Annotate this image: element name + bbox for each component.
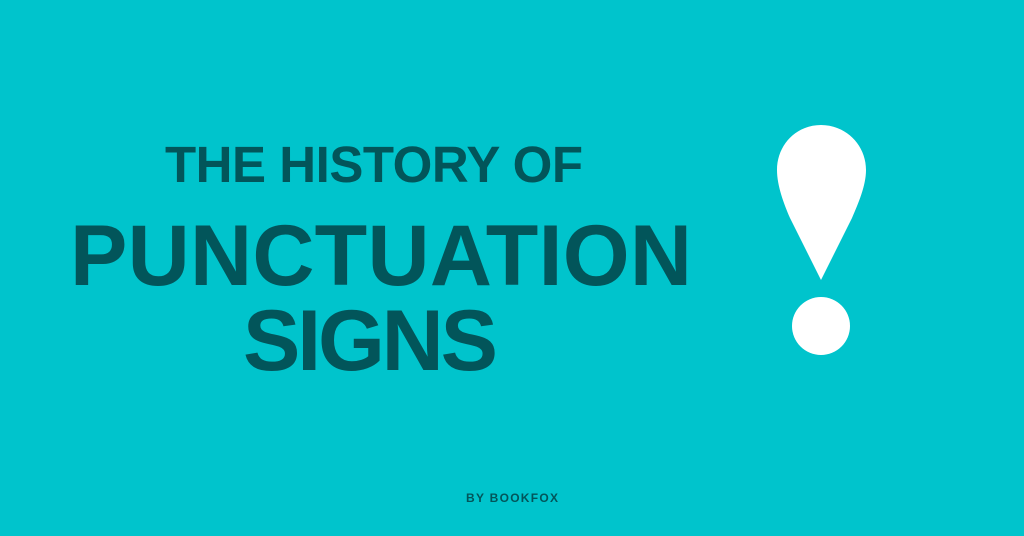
title <box>70 136 692 389</box>
icon: exclamation mark <box>777 125 866 355</box>
title line 3: SIGNS <box>243 293 498 389</box>
byline: BY BOOKFOX <box>466 491 558 505</box>
title line 2: PUNCTUATION <box>70 208 692 304</box>
title line 1: THE HISTORY OF <box>165 136 583 193</box>
